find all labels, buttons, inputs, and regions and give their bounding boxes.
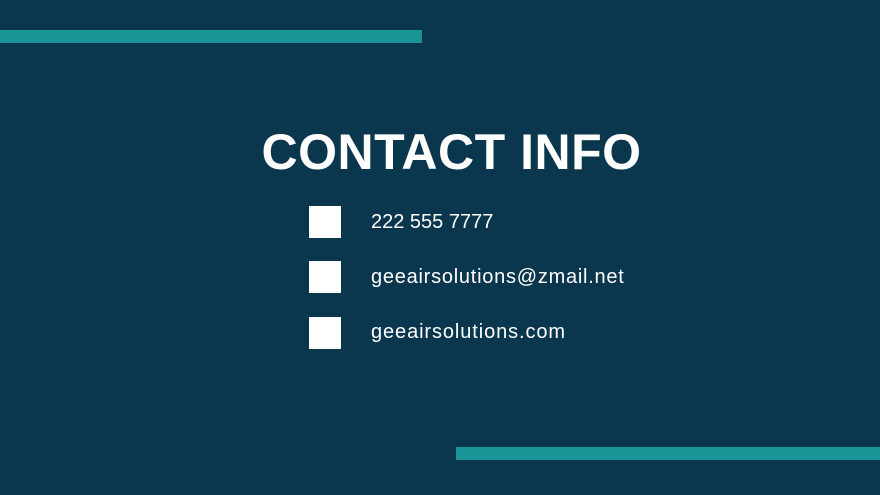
top accent bar bbox=[0, 30, 422, 43]
email: geeairsolutions@zmail.net bbox=[371, 266, 625, 288]
icon: phone bbox=[309, 206, 341, 238]
icon: email bbox=[309, 261, 341, 293]
phone number: 222 555 7777 bbox=[371, 211, 493, 233]
website: geeairsolutions.com bbox=[371, 321, 566, 343]
icon: website bbox=[309, 317, 341, 349]
bottom accent bar bbox=[456, 447, 880, 460]
title: CONTACT INFO bbox=[261, 124, 642, 180]
contact list bbox=[309, 206, 625, 349]
